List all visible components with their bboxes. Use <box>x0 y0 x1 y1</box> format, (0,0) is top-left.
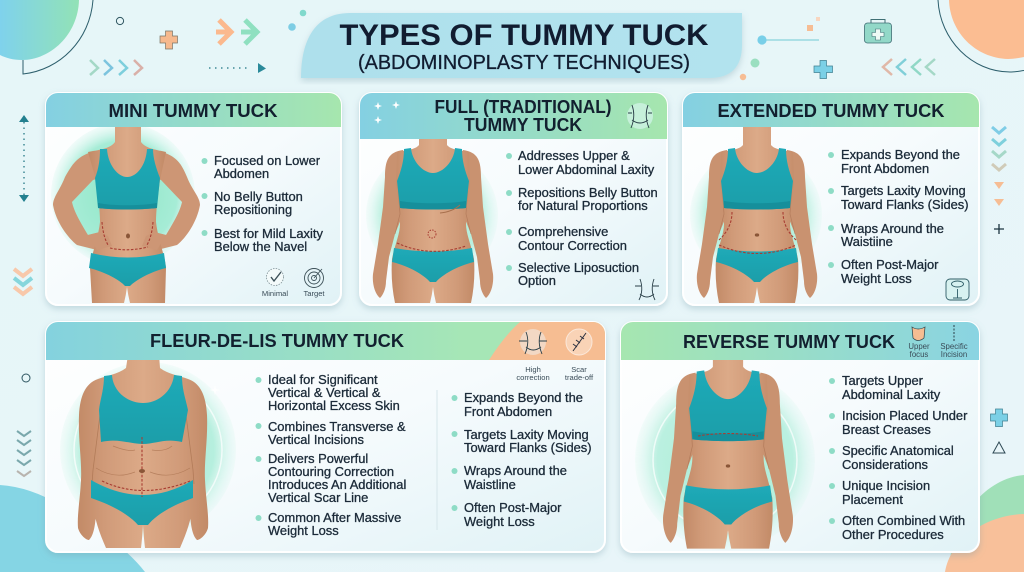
panel: extended tummy tuck <box>683 93 979 305</box>
figure: extended <box>690 125 822 303</box>
arrow: vertical dotted double arrow <box>19 115 29 202</box>
icon: high correction: High <box>525 365 541 374</box>
icon: minimal <box>262 268 288 298</box>
bullets: left column: Vertical & Vertical & <box>268 385 381 400</box>
bullets: full: Addresses Upper & <box>518 148 630 163</box>
heading: extended: EXTENDED TUMMY TUCK <box>718 100 945 121</box>
heading: full: TUMMY TUCK <box>464 114 583 135</box>
icon: specific incision <box>940 325 968 359</box>
bullets: full: Selective Liposuction <box>518 260 639 275</box>
bullets: extended <box>828 147 969 286</box>
figure: full <box>366 125 498 303</box>
decoration: top-left circle and arc <box>0 0 93 74</box>
bullets: mini: Repositioning <box>214 202 292 217</box>
bullets: full: Comprehensive <box>518 224 608 239</box>
header corner: peach <box>489 322 605 360</box>
bullets: extended: Front Abdomen <box>841 161 929 176</box>
bullets: extended: Weight Loss <box>841 271 912 286</box>
bullets: left column: Combines Transverse & <box>268 419 406 434</box>
decoration: bottom-left blue shape <box>0 485 145 572</box>
bullets: mini <box>202 153 323 254</box>
bullets: left column: Delivers Powerful <box>268 451 368 466</box>
bullets: left column: Vertical Incisions <box>268 432 364 447</box>
bullets: full: for Natural Proportions <box>518 198 648 213</box>
bullets: reverse: Other Procedures <box>842 527 944 542</box>
bullets: right column <box>452 390 592 529</box>
icon: waist top <box>627 103 653 129</box>
decoration: dots near title <box>288 10 306 31</box>
icon: specific incision: Incision <box>941 350 967 359</box>
bullets: extended: Targets Laxity Moving <box>841 183 966 198</box>
icon: three chevrons left <box>14 269 32 294</box>
bullets: left column: Ideal for Significant <box>268 372 378 387</box>
icon: specific incision: Specific <box>940 342 968 351</box>
heading: reverse: REVERSE TUMMY TUCK <box>683 331 896 352</box>
heading: full <box>434 96 612 135</box>
bullets: mini: Abdomen <box>214 166 269 181</box>
icon: blue plus right <box>990 409 1008 426</box>
icon: sparkles <box>374 101 400 124</box>
bullets: reverse: Incision Placed Under <box>842 408 968 423</box>
panel header: fleur-de-lis <box>46 322 605 360</box>
icon: scale <box>946 279 969 300</box>
bullets: extended: Wraps Around the <box>841 221 944 236</box>
subtitle: (ABDOMINOPLASTY TECHNIQUES) <box>358 52 690 74</box>
title: TYPES OF TUMMY TUCK <box>340 19 709 52</box>
bullets: reverse: Considerations <box>842 457 928 472</box>
bullets: right column: Front Abdomen <box>464 404 552 419</box>
panel header: reverse <box>621 322 979 360</box>
heading: mini: MINI TUMMY TUCK <box>108 100 278 121</box>
icon: medical bag <box>864 20 892 43</box>
icon: scar trade-off: trade-off <box>565 373 594 382</box>
bullets: full: Contour Correction <box>518 238 627 253</box>
bullets: full: Option <box>518 273 556 288</box>
icon: left chevrons <box>883 59 935 75</box>
bullets: left column: Contouring Correction <box>268 464 394 479</box>
bullets: reverse: Specific Anatomical <box>842 443 954 458</box>
icon: right chevrons <box>992 127 1006 170</box>
bullets: left column: Common After Massive <box>268 510 401 525</box>
panel header: extended <box>683 93 979 127</box>
icon: upper focus <box>908 327 930 359</box>
bullets: right column: Often Post-Major <box>464 500 562 515</box>
arrow: dotted right <box>209 63 266 73</box>
bullets: right column: Expands Beyond the <box>464 390 583 405</box>
bullets: left column <box>256 372 406 538</box>
icon: ring left <box>22 374 30 382</box>
icon: peach and green arrows <box>216 20 257 44</box>
bullets: right column: Weight Loss <box>464 514 535 529</box>
bullets: reverse <box>829 373 968 542</box>
bullets: right column: Waistline <box>464 477 516 492</box>
icon: four chevrons <box>90 60 142 75</box>
icon: target <box>303 268 325 298</box>
title banner <box>301 13 742 78</box>
bullets: reverse: Often Combined With <box>842 513 965 528</box>
bullets: left column: Horizontal Excess Skin <box>268 398 400 413</box>
bullets: reverse: Targets Upper <box>842 373 924 388</box>
bullets: right column: Wraps Around the <box>464 463 567 478</box>
bullets: extended: Often Post-Major <box>841 257 939 272</box>
icon: small ring <box>116 17 124 25</box>
bullets: right column: Targets Laxity Moving <box>464 427 589 442</box>
bullets: mini: Below the Navel <box>214 239 307 254</box>
bullets: reverse: Breast Creases <box>842 422 931 437</box>
decoration: top-right peach circle and ring <box>938 0 1024 72</box>
icon: scar trade-off <box>565 329 594 382</box>
figure: fleur-de-lis <box>60 355 236 548</box>
heading: full: FULL (TRADITIONAL) <box>434 96 612 117</box>
bullets: extended: Waistiine <box>841 234 893 249</box>
bullets: extended: Toward Flanks (Sides) <box>841 197 969 212</box>
bullets: full: Repositions Belly Button <box>518 185 658 200</box>
figure: mini <box>51 123 200 303</box>
icon: peach plus <box>160 31 178 49</box>
panel: mini tummy tuck <box>46 93 341 305</box>
icon: scar trade-off: Scar <box>571 365 587 374</box>
bullets: full <box>506 148 658 288</box>
icon: peach triangles <box>994 182 1004 206</box>
bullets: mini: Best for Mild Laxity <box>214 226 323 241</box>
icon: upper focus: Upper <box>908 342 930 351</box>
heading: fleur-de-lis: FLEUR-DE-LIS TUMMY TUCK <box>150 330 405 351</box>
figure: reverse <box>635 344 815 550</box>
panel: reverse tummy tuck <box>621 322 979 552</box>
panel header: mini <box>46 93 341 127</box>
icon: target: Target <box>303 289 325 298</box>
icon: five chevrons left <box>17 431 31 476</box>
decoration: line and dots right of title <box>740 17 820 80</box>
icon: waist bottom <box>635 279 659 300</box>
bullets: left column: Weight Loss <box>268 523 339 538</box>
panel: fleur-de-lis tummy tuck <box>46 322 605 552</box>
bullets: reverse: Placement <box>842 492 903 507</box>
bullets: left column: Vertical Scar Line <box>268 490 368 505</box>
icon: minimal: Minimal <box>262 289 288 298</box>
icon: high correction <box>516 329 550 382</box>
icon: blue plus <box>814 60 832 78</box>
icon: triangle outline <box>993 442 1005 453</box>
bullets: reverse: Abdominal Laxity <box>842 387 941 402</box>
decoration: bottom-right green and peach circles <box>945 475 1024 572</box>
bullets: reverse: Unique Incision <box>842 478 930 493</box>
bullets: left column: Introduces An Additional <box>268 477 406 492</box>
icon: high correction: correction <box>516 373 550 382</box>
bullets: mini: Focused on Lower <box>214 153 321 168</box>
bullets: extended: Expands Beyond the <box>841 147 960 162</box>
panel: full tummy tuck <box>360 93 667 305</box>
bullets: right column: Toward Flanks (Sides) <box>464 440 592 455</box>
bullets: full: Lower Abdominal Laxity <box>518 162 655 177</box>
icon: dark plus <box>994 224 1004 234</box>
bullets: mini: No Belly Button <box>214 189 303 204</box>
panel header: full <box>360 93 667 139</box>
icon: upper focus: focus <box>910 350 928 359</box>
